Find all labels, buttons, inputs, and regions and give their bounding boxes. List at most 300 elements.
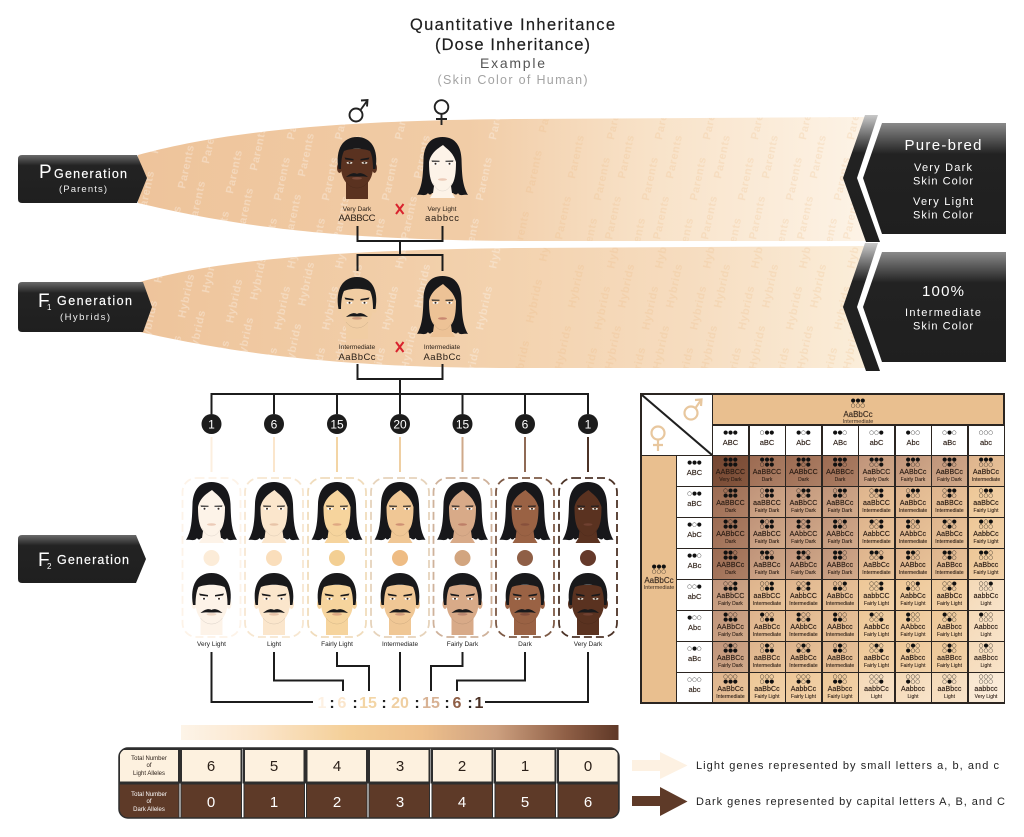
row gamete abC: ○○● [687,584,702,590]
punnett row ABc: ○●● [760,555,774,561]
gradient bar [181,725,618,740]
F2 column: very dark [559,414,617,648]
row: light alleles: of [146,763,152,769]
row: light alleles: 0 [584,758,592,775]
punnett row abC: ○○○ [979,586,993,592]
punnett row abC [713,580,1004,610]
row gamete abc: ○○○ [687,677,702,683]
punnett column gametes: Abc [907,438,919,447]
punnett row aBC: ○●○ [942,493,957,499]
banner: F1 generation hybrids: Hybrids Hybrids Hybrids [511,216,558,386]
punnett row abc: ○○○ [869,674,884,680]
punnett row abC: Fairly Dark [718,601,743,607]
punnett row Abc: ○○● [869,617,884,623]
punnett left header: mother genotype: AaBbCc [644,576,674,585]
punnett row ABC: ●●● [796,457,811,463]
punnett row ABc: AABBcc [827,562,853,569]
punnett row abc: aabbcc [974,686,998,693]
punnett column gametes: ●○● [796,430,811,436]
punnett row AbC: AaBbCC [753,531,781,538]
punnett left header: mother genotype: Intermediate [644,585,674,591]
punnett row ABC: ●●● [760,457,774,463]
punnett row ABC: ●○○ [906,462,920,468]
punnett row aBC: ○●● [760,488,774,494]
punnett row ABC: AABBCC [716,469,745,476]
punnett row aBC: Intermediate [862,508,891,514]
panel: pure-bred: Skin Color [913,176,973,188]
punnett row aBc: ●○● [796,648,811,654]
punnett row abc: ○○○ [979,674,993,680]
punnett row aBC: ●○○ [906,493,920,499]
punnett row abc: ○○○ [760,674,774,680]
punnett row abC: ○○● [760,581,774,587]
banner: F1 generation hybrids: Hybrids Hybrids Hybrids [307,223,354,393]
punnett row abc: Light [944,694,955,700]
punnett row aBc: AaBbCc [790,655,817,662]
punnett column gametes: ●●● [723,430,738,436]
punnett row abc: ○○○ [796,674,811,680]
punnett row AbC: Dark [725,539,736,545]
punnett row aBc: ○●○ [869,643,884,649]
punnett row aBc: ○●○ [906,643,920,649]
punnett row aBC: ○●● [723,488,738,494]
punnett row ABc: Intermediate [899,570,927,576]
banner: P generation parents: Parents Parents Parents [367,95,414,263]
punnett row ABC: ●●● [869,457,884,463]
punnett row aBc: ●●● [723,648,738,654]
panel: pure-bred: Pure-bred [904,137,982,154]
punnett row ABc: ●●○ [979,550,993,556]
punnett row ABC: ○●● [760,462,774,468]
label: F1 father genotype: Intermediate [339,344,375,351]
banner: F1 generation hybrids: Hybrids Hybrids Hybrids [163,211,210,381]
punnett row AbC: Fairly Dark [828,539,852,545]
punnett row Abc: AABbcc [827,624,853,631]
punnett row abc: Fairly Light [827,694,853,700]
row: dark alleles: 4 [458,794,466,811]
punnett row abc: ●●○ [833,679,847,685]
tab: P generation [18,155,147,203]
punnett row ABC: ○○● [869,462,884,468]
punnett row Abc: ●○○ [979,612,993,618]
punnett row abc: Light [907,694,919,700]
punnett row aBC: ●○● [796,493,811,499]
row: dark alleles: of [146,799,152,805]
banner: F1 generation hybrids: Hybrids Hybrids Hybrids [603,201,650,371]
punnett row aBC: Dark [725,508,736,514]
tab: P generation: Generation [54,167,127,181]
punnett row Abc: AaBbcc [937,624,962,631]
punnett row aBc: aaBBcc [937,655,962,662]
panel: 100 percent intermediate: Intermediate [905,307,981,319]
tab: F2 generation: F [38,550,50,571]
punnett row abC: ●●○ [833,586,847,592]
punnett row aBc: Fairly Light [864,663,889,669]
punnett row aBC: Fairly Dark [791,508,816,514]
tab: F2 generation: 2 [47,562,52,571]
punnett row ABc: Intermediate [862,570,891,576]
row: dark alleles: 1 [270,794,278,811]
punnett row ABC: ●●● [979,457,993,463]
punnett row abC: AabbCC [790,593,817,600]
punnett row abC: ○○● [723,581,738,587]
label: F1 mother genotype: Intermediate [424,344,460,351]
text: dark genes: Dark genes represented by capital letters A, B, and C [696,796,1005,808]
ratio 1:6:15:20:15:6:1 [318,695,484,712]
punnett row ABc: ●●○ [796,550,811,556]
punnett row aBc: ○●○ [942,648,957,654]
punnett column gametes: abC [870,438,883,447]
banner: F1 generation hybrids: Hybrids Hybrids Hybrids [235,193,282,363]
banner: F1 generation hybrids: Hybrids Hybrids Hybrids [139,176,186,346]
punnett row abc: ○●○ [942,679,957,685]
face: intermediate mother [417,276,468,337]
row: dark alleles: Dark Alleles [133,807,165,813]
punnett row abC: aabbCC [863,593,890,600]
punnett row aBc: AaBbcc [901,655,925,662]
ratio 1:6:15:20:15:6:1: 15 [359,695,377,712]
punnett row abc: Light [871,694,882,700]
punnett row Abc: Intermediate [826,632,854,638]
label: F1 mother genotype: AaBbCc [424,352,461,363]
punnett row Abc: ○○○ [979,617,993,623]
tab: P generation: (Parents) [59,184,107,195]
punnett top header: father genotype [713,395,1003,424]
row: dark alleles: 2 [333,794,341,811]
punnett row ABc: Fairly Light [973,570,999,576]
punnett row Abc: ●○○ [833,612,847,618]
banner: P generation parents: Parents Parents Parents [187,58,234,226]
punnett row aBc: ○●○ [979,643,993,649]
banner: P generation parents: Parents Parents Parents [511,88,558,256]
punnett row AbC: ●○● [906,519,920,525]
row gamete aBc [677,642,712,672]
row: light alleles: 2 [458,758,466,775]
row: light alleles [131,756,592,777]
F2 column: fairly light [308,414,366,648]
punnett row Abc: ●○○ [906,612,920,618]
punnett row Abc: ○●● [760,617,774,623]
punnett row abc: ○○○ [942,674,957,680]
banner: P generation parents: Parents Parents Parents [235,65,282,233]
label: F1 father genotype [338,344,376,363]
banner: P generation parents: Parents Parents Parents [399,73,446,241]
punnett row abC: Intermediate [826,601,854,607]
punnett row ABc: ○○● [869,555,884,561]
punnett row abc: ○○○ [979,679,993,685]
punnett column gametes: AbC [796,438,811,447]
punnett row ABC: Fairly Dark [864,477,889,483]
banner: P generation parents: Parents Parents Parents [579,95,626,263]
punnett row abc: aaBbcc [938,686,961,693]
label: F1 father genotype: AaBbCc [338,352,376,363]
banner: F1 generation hybrids: Hybrids Hybrids Hybrids [283,199,330,369]
punnett row ABc [713,549,1004,579]
punnett column gametes: ABc [833,438,847,447]
punnett row aBc: AaBBCc [717,655,744,662]
punnett row aBC: AaBBCc [826,500,854,507]
punnett row AbC: ●○● [833,519,847,525]
ratio 1:6:15:20:15:6:1: : [467,695,473,712]
F2 column: intermediate: Intermediate [382,641,418,648]
punnett row aBc: Intermediate [753,663,781,669]
row gamete aBc: aBc [688,654,701,663]
tab: P generation: P [39,162,52,183]
panel: punnett square [640,393,1005,704]
face: very light mother [417,137,468,198]
punnett row aBc: Intermediate [826,663,854,669]
punnett row ABC: AABbCC [789,469,818,476]
punnett row aBc: ○●○ [833,643,847,649]
punnett top header: father genotype: Intermediate [843,419,873,425]
punnett row Abc: ●○○ [796,612,811,618]
ratio 1:6:15:20:15:6:1: : [381,695,387,712]
tab: F2 generation [18,535,146,583]
row: dark alleles [131,792,592,813]
punnett row AbC: Intermediate [899,539,927,545]
punnett row Abc: Intermediate [789,632,818,638]
arrow: dark genes [632,787,688,816]
punnett row AbC: ●●● [723,524,738,530]
ratio 1:6:15:20:15:6:1: 1 [318,695,327,712]
punnett row AbC: AAbbCc [900,531,926,538]
punnett row AbC: Fairly Dark [791,539,816,545]
banner: P generation parents: Parents Parents Parents [307,95,354,263]
punnett row AbC: Intermediate [935,539,964,545]
row gamete Abc: ●○○ [687,615,702,621]
punnett row Abc: Fairly Light [937,632,962,638]
row gamete Abc: Abc [688,623,701,632]
banner: P generation parents: Parents Parents Parents [699,73,746,241]
punnett column gametes [713,426,1004,455]
punnett row abC: ○○● [869,581,884,587]
punnett row aBc: Fairly Light [937,663,962,669]
punnett row ABc: ○○○ [979,555,993,561]
label: mother genotype: aabbcc [425,213,459,224]
punnett top header: father genotype: AaBbCc [843,410,873,419]
F2 column: light [245,414,303,648]
banner: P generation parents: Parents Parents Parents [259,95,306,263]
punnett row aBC: ○○○ [979,493,993,499]
punnett row aBc: ○●○ [942,643,957,649]
punnett row aBC: ○●● [979,488,993,494]
punnett row ABc: AaBBcc [937,562,962,569]
banner: F1 generation hybrids: Hybrids Hybrids Hybrids [211,216,258,386]
punnett row aBc: ●●○ [833,648,847,654]
punnett row abC: ○●○ [942,586,957,592]
row gamete AbC [677,518,712,548]
punnett row Abc: ●○○ [942,612,957,618]
row gamete aBc: ○●○ [687,646,702,652]
punnett row abC: ●●● [723,586,738,592]
punnett row aBC: aaBBCC [753,500,781,507]
F2 column: dark [496,414,554,648]
punnett row ABC: Dark [798,477,809,483]
punnett row ABc: ○●○ [942,555,957,561]
punnett row abC: Fairly Light [900,601,926,607]
punnett row aBc: ○●○ [723,643,738,649]
banner: P generation parents: Parents Parents Parents [819,95,866,263]
icon: female symbol [435,100,448,125]
punnett row ABc: ●●○ [760,550,774,556]
punnett row ABc: ●●○ [869,550,884,556]
title: (Skin Color of Human) [438,73,588,87]
punnett row abc: ○○○ [723,674,738,680]
punnett row abc: ○●● [760,679,774,685]
punnett row ABC: ●●● [723,462,738,468]
punnett row abC: ○●● [760,586,774,592]
punnett column gametes: ○●● [760,430,774,436]
punnett row abC: ●○○ [906,586,920,592]
punnett row aBc: aaBBCc [754,655,780,662]
punnett row AbC: AaBbCc [936,531,963,538]
punnett row abc: AaBbcc [828,686,852,693]
punnett column gametes: ○○● [869,430,884,436]
punnett row aBC: ○○● [869,493,884,499]
F2 column: intermediate: 20 [393,418,407,432]
punnett row AbC: ●○● [796,524,811,530]
row: light alleles: Total Number [131,756,167,762]
banner: P generation parents: Parents Parents Parents [163,83,210,251]
punnett row ABC: ●○● [796,462,811,468]
punnett row aBc: ○●○ [796,643,811,649]
punnett row AbC: Fairly Light [973,539,999,545]
banner: P generation parents: Parents Parents Parents [795,73,842,241]
punnett row abc: Fairly Light [754,694,780,700]
punnett row ABC: ●●● [906,457,920,463]
punnett row AbC: ○○○ [979,524,993,530]
banner: F1 generation hybrids: Hybrids Hybrids Hybrids [841,201,888,371]
punnett row ABc: ●●○ [723,550,738,556]
punnett row Abc: ●○○ [869,612,884,618]
punnett row abc: ○○● [869,679,884,685]
row gamete aBC: ○●● [687,491,702,497]
label: mother genotype: Very Light [428,206,457,213]
punnett row abC: Fairly Light [937,601,962,607]
punnett row abC: Fairly Light [864,601,889,607]
F2 column: fairly dark: Fairly Dark [447,641,479,648]
icon: cross F1 [396,342,404,352]
punnett row AbC [713,518,1004,548]
punnett row abc: AabbCc [791,686,816,693]
banner: F1 generation hybrids: Hybrids Hybrids Hybrids [651,201,698,371]
punnett column gametes: ○●○ [942,430,957,436]
punnett row Abc: AabbCc [864,624,889,631]
arrow: light genes [632,752,688,779]
panel: pure-bred: Very Light [913,196,973,208]
F2 column: fairly light: Fairly Light [321,641,353,648]
punnett row abc: ●○○ [906,679,920,685]
F2 column: dark: 6 [522,418,529,432]
punnett row abC: Light [980,601,992,607]
row: light alleles: 5 [270,758,278,775]
chevron: F1 generation [843,243,880,371]
punnett row ABc: ●●○ [942,550,957,556]
punnett row AbC: ○●○ [942,524,957,530]
punnett row aBc: ○●● [760,648,774,654]
punnett row aBC: ○●● [760,493,774,499]
punnett row ABc: ●●○ [833,550,847,556]
icon: cross P [396,204,404,214]
punnett row aBC: Intermediate [935,508,964,514]
punnett row aBc: ○○● [869,648,884,654]
punnett row ABc: Intermediate [935,570,964,576]
punnett row ABc: AABbCc [790,562,817,569]
punnett row AbC: Intermediate [862,539,891,545]
punnett row Abc: ●○○ [760,612,774,618]
punnett row abc: ○○○ [906,674,920,680]
F2 column: very dark: 1 [585,418,592,432]
F2 column: fairly dark: 15 [456,418,469,432]
punnett row Abc: ●●○ [833,617,847,623]
tab: F1 generation [18,282,152,332]
punnett row ABc: Dark [725,570,736,576]
punnett row aBc: Intermediate [789,663,818,669]
punnett column gametes: abc [980,438,992,447]
row: light alleles: 6 [207,758,215,775]
punnett row Abc: Intermediate [753,632,781,638]
F2 column: light: 6 [271,418,278,432]
punnett row Abc: ○●○ [942,617,957,623]
punnett row aBC: ○●● [869,488,884,494]
punnett column gametes: ●●○ [833,430,847,436]
banner: P generation parents: Parents Parents Parents [283,71,330,239]
row gamete abc: abc [688,685,701,694]
punnett row abC: ○○● [906,581,920,587]
banner: F1 generation hybrids: Hybrids Hybrids Hybrids [699,201,746,371]
row gamete aBC: aBC [687,499,702,508]
punnett row ABC: AABbCc [899,469,927,476]
punnett row AbC: ●○● [760,519,774,525]
punnett row abC: aabbCc [974,593,998,600]
banner: P generation parents: Parents Parents Parents [553,73,600,241]
F2 column: very light: Very Light [197,641,226,648]
F2 column: light: Light [267,641,281,648]
banner: P generation parents: Parents Parents Parents [603,73,650,241]
punnett row abC: ●○● [796,586,811,592]
banner: F1 generation hybrids: Hybrids Hybrids Hybrids [675,223,722,393]
punnett left header: mother genotype: ●●● [652,564,666,570]
title: Quantitative Inheritance [410,16,615,34]
punnett row aBC: AaBBCC [716,500,745,507]
row: light alleles: Light Alleles [133,771,165,777]
row gamete ABC [677,456,712,486]
face: very dark father [337,137,377,199]
punnett row AbC: ●●○ [833,524,847,530]
punnett row AbC: ●○● [796,519,811,525]
punnett row aBc: aaBbcc [974,655,998,662]
punnett row ABc: Fairly Dark [791,570,816,576]
punnett row ABC: AABBCc [826,469,854,476]
punnett row Abc: AaBbCc [754,624,780,631]
punnett row aBC: aaBbCC [863,500,890,507]
punnett row Abc: AAbbCc [790,624,817,631]
row: dark alleles: 5 [521,794,529,811]
punnett row abc: Fairly Light [791,694,816,700]
punnett row ABC: ●●● [942,457,957,463]
punnett row abc: ○○○ [833,674,847,680]
F2 column: fairly light: 15 [330,418,344,432]
ratio 1:6:15:20:15:6:1: : [414,695,420,712]
punnett row abC: AaBbCc [827,593,853,600]
punnett row abc: Very Light [975,694,997,700]
punnett row ABC: Dark [835,477,845,483]
punnett row ABC: Fairly Dark [937,477,962,483]
punnett row Abc: AAbbcc [901,624,925,631]
row: dark alleles: 0 [207,794,215,811]
ratio 1:6:15:20:15:6:1: : [352,695,358,712]
punnett row Abc: Aabbcc [974,624,998,631]
